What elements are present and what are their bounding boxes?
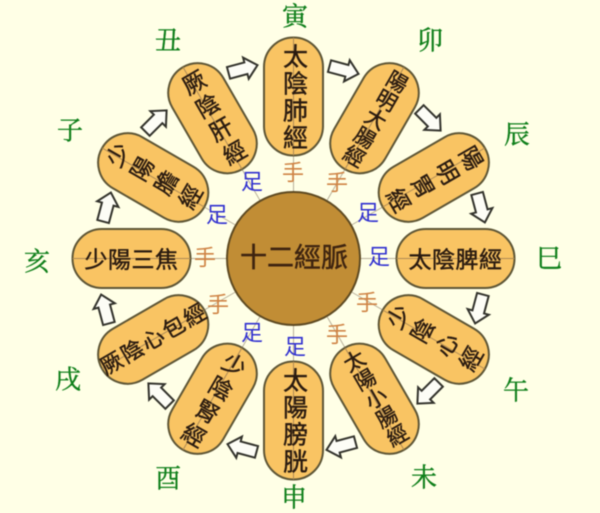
central hub: 十二經脈 [227,192,360,325]
pill: 太陰脾經 [396,229,514,288]
pill: 太陽小腸經: 太陽小腸經 [338,346,412,451]
pill: 厥陰肝經 [157,52,268,184]
hand and foot labels: 足 [357,200,379,226]
hand and foot labels: 手 [282,160,304,186]
earthly branch labels: 午 [503,376,529,406]
hand and foot labels: 手 [207,292,229,318]
hand and foot labels: 足 [368,244,390,270]
pill: 太陰肺經 [264,38,323,156]
hand and foot labels: 足 [241,170,263,194]
pill: 少陽三焦: 少陽三焦 [84,246,178,272]
pill: 太陽小腸經 [319,333,430,465]
flow arrows (clockwise) [90,54,496,463]
hand and foot labels: 足 [284,334,306,360]
pill: 少陰腎經: 少陰腎經 [173,347,250,454]
hand and foot labels: 足 [206,202,228,228]
pill: 太陽膀胱 [264,362,323,480]
earthly branch labels: 戌 [55,366,81,394]
hand and foot labels: 足 [241,320,263,346]
pill: 厥陰肝經: 厥陰肝經 [175,66,252,173]
pill: 陽明胃經: 陽明胃經 [377,139,487,218]
pill: 少陰心經 [368,284,500,395]
earthly branch labels: 未 [411,464,437,492]
earthly branch labels: 辰 [504,120,530,150]
pill: 少陽膽經 [87,122,219,233]
pill: 少陽三焦 [72,229,190,288]
pill: 陽明大腸經 [319,52,430,184]
pill: 厥陰心包經 [87,283,221,395]
hand and foot labels [194,160,390,360]
central hub: 十二經脈: 十二經脈 [240,243,348,273]
hand and foot labels: 手 [194,246,216,270]
pill: 陽明大腸經: 陽明大腸經 [338,66,412,171]
earthly branch labels: 卯 [417,26,443,56]
earthly branch labels: 巳 [536,244,562,274]
pill: 厥陰心包經: 厥陰心包經 [96,298,212,380]
pill: 太陰肺經: 太陰肺經 [280,44,308,152]
pill: 太陰脾經: 太陰脾經 [408,246,502,272]
earthly branch labels: 亥 [24,248,50,276]
earthly branch labels: 子 [57,116,83,146]
pill: 少陽膽經: 少陽膽經 [100,139,210,218]
hand and foot labels: 手 [326,322,348,348]
hand and foot labels: 手 [356,290,378,316]
pill: 太陽膀胱: 太陽膀胱 [280,368,308,476]
pill: 少陰腎經 [157,333,268,465]
pill: 少陰心經: 少陰心經 [381,301,491,380]
earthly branch labels: 丑 [155,26,181,56]
pill: 陽明胃經 [368,122,500,233]
spokes connecting hub to meridian pills [185,150,402,367]
hand and foot labels: 手 [326,170,348,196]
earthly branch labels: 申 [281,484,307,512]
earthly branch labels: 寅 [282,2,310,32]
earthly branch labels: 酉 [155,464,181,494]
